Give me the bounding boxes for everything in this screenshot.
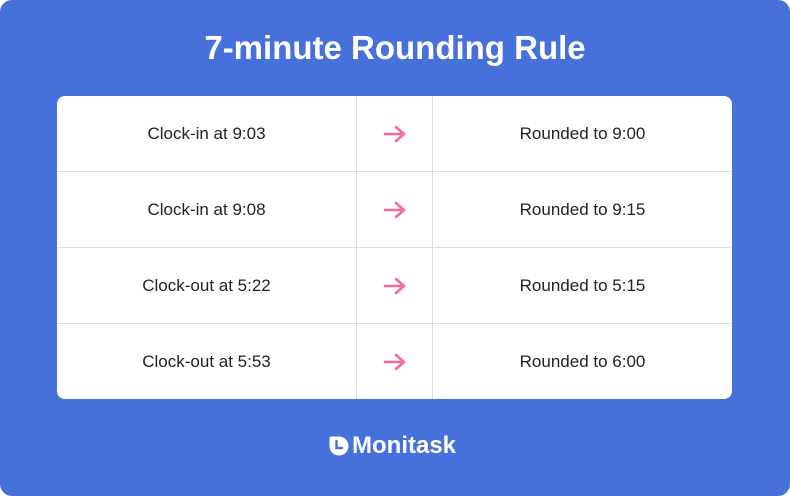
row 4: Rounded to 6:00 [520,352,645,371]
icon: logo mark [330,436,348,456]
row 3: Clock-out at 5:22 [142,276,271,294]
row 4: Clock-out at 5:53 [142,352,271,371]
row 3 [57,248,732,324]
row 2 [57,172,732,248]
row 2: Rounded to 9:15 [520,200,645,218]
row 4 [142,324,645,399]
row 1 [57,96,732,172]
row 3: Rounded to 5:15 [520,276,645,294]
title: 7-minute Rounding Rule [204,29,586,66]
row 1: Rounded to 9:00 [520,124,645,142]
table [57,96,732,399]
row 2: Clock-in at 9:08 [147,200,266,218]
logo: Monitask [352,432,456,459]
row 1: Clock-in at 9:03 [147,124,266,142]
